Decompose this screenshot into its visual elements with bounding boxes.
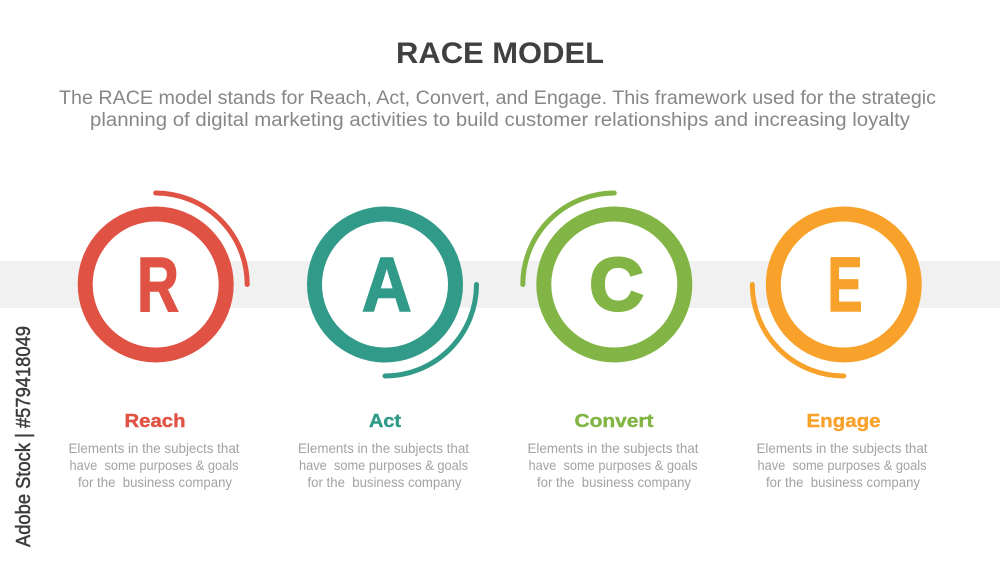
description: Convert: have some purposes & goals — [528, 457, 698, 473]
panel: Convert — [523, 193, 699, 490]
panel: Reach — [68, 193, 247, 490]
description: Act: have some purposes & goals — [299, 457, 468, 473]
description: Reach: for the business company — [78, 474, 232, 490]
description: Act — [298, 440, 469, 490]
title: RACE MODEL — [396, 37, 604, 70]
icon: Act ring — [314, 214, 456, 355]
heading: Convert: Convert — [574, 411, 654, 431]
icon: Engage ring — [773, 214, 914, 355]
description: Act: for the business company — [308, 474, 462, 490]
heading: Engage: Engage — [806, 411, 880, 431]
description: Engage: have some purposes & goals — [758, 457, 926, 473]
subtitle text block — [59, 88, 936, 131]
panel: Act — [298, 214, 476, 490]
description: Convert: for the business company — [537, 474, 691, 490]
letter A: A — [362, 242, 412, 328]
arc: Convert accent — [523, 193, 614, 284]
description: Reach — [68, 440, 240, 490]
subtitle text block: The RACE model stands for Reach, Act, Convert, and Engage. This framework used for the strategic — [59, 88, 936, 109]
arc: Act accent — [385, 284, 476, 376]
icon: Convert ring — [544, 214, 685, 355]
heading: Act: Act — [369, 411, 401, 431]
description: Reach: Elements in the subjects that — [68, 440, 240, 456]
description: Engage — [756, 440, 928, 490]
panel: Engage — [752, 214, 928, 490]
description: Reach: have some purposes & goals — [70, 457, 238, 473]
subtitle text block: planning of digital marketing activities to build customer relationships and increasing loyalty — [90, 110, 911, 131]
heading: Reach: Reach — [124, 411, 186, 431]
arc: Reach accent — [156, 193, 247, 284]
watermark: Adobe Stock ID: Adobe Stock | #579418049 — [13, 326, 35, 547]
description: Engage: Elements in the subjects that — [756, 440, 928, 456]
letter C: C — [590, 243, 644, 326]
description: Engage: for the business company — [766, 474, 920, 490]
arc: Engage accent — [752, 284, 844, 376]
description: Convert — [528, 440, 699, 490]
letter E: E — [828, 242, 862, 328]
icon: Reach ring — [85, 214, 226, 355]
description: Convert: Elements in the subjects that — [528, 440, 699, 456]
description: Act: Elements in the subjects that — [298, 440, 469, 456]
letter R: R — [137, 242, 179, 328]
